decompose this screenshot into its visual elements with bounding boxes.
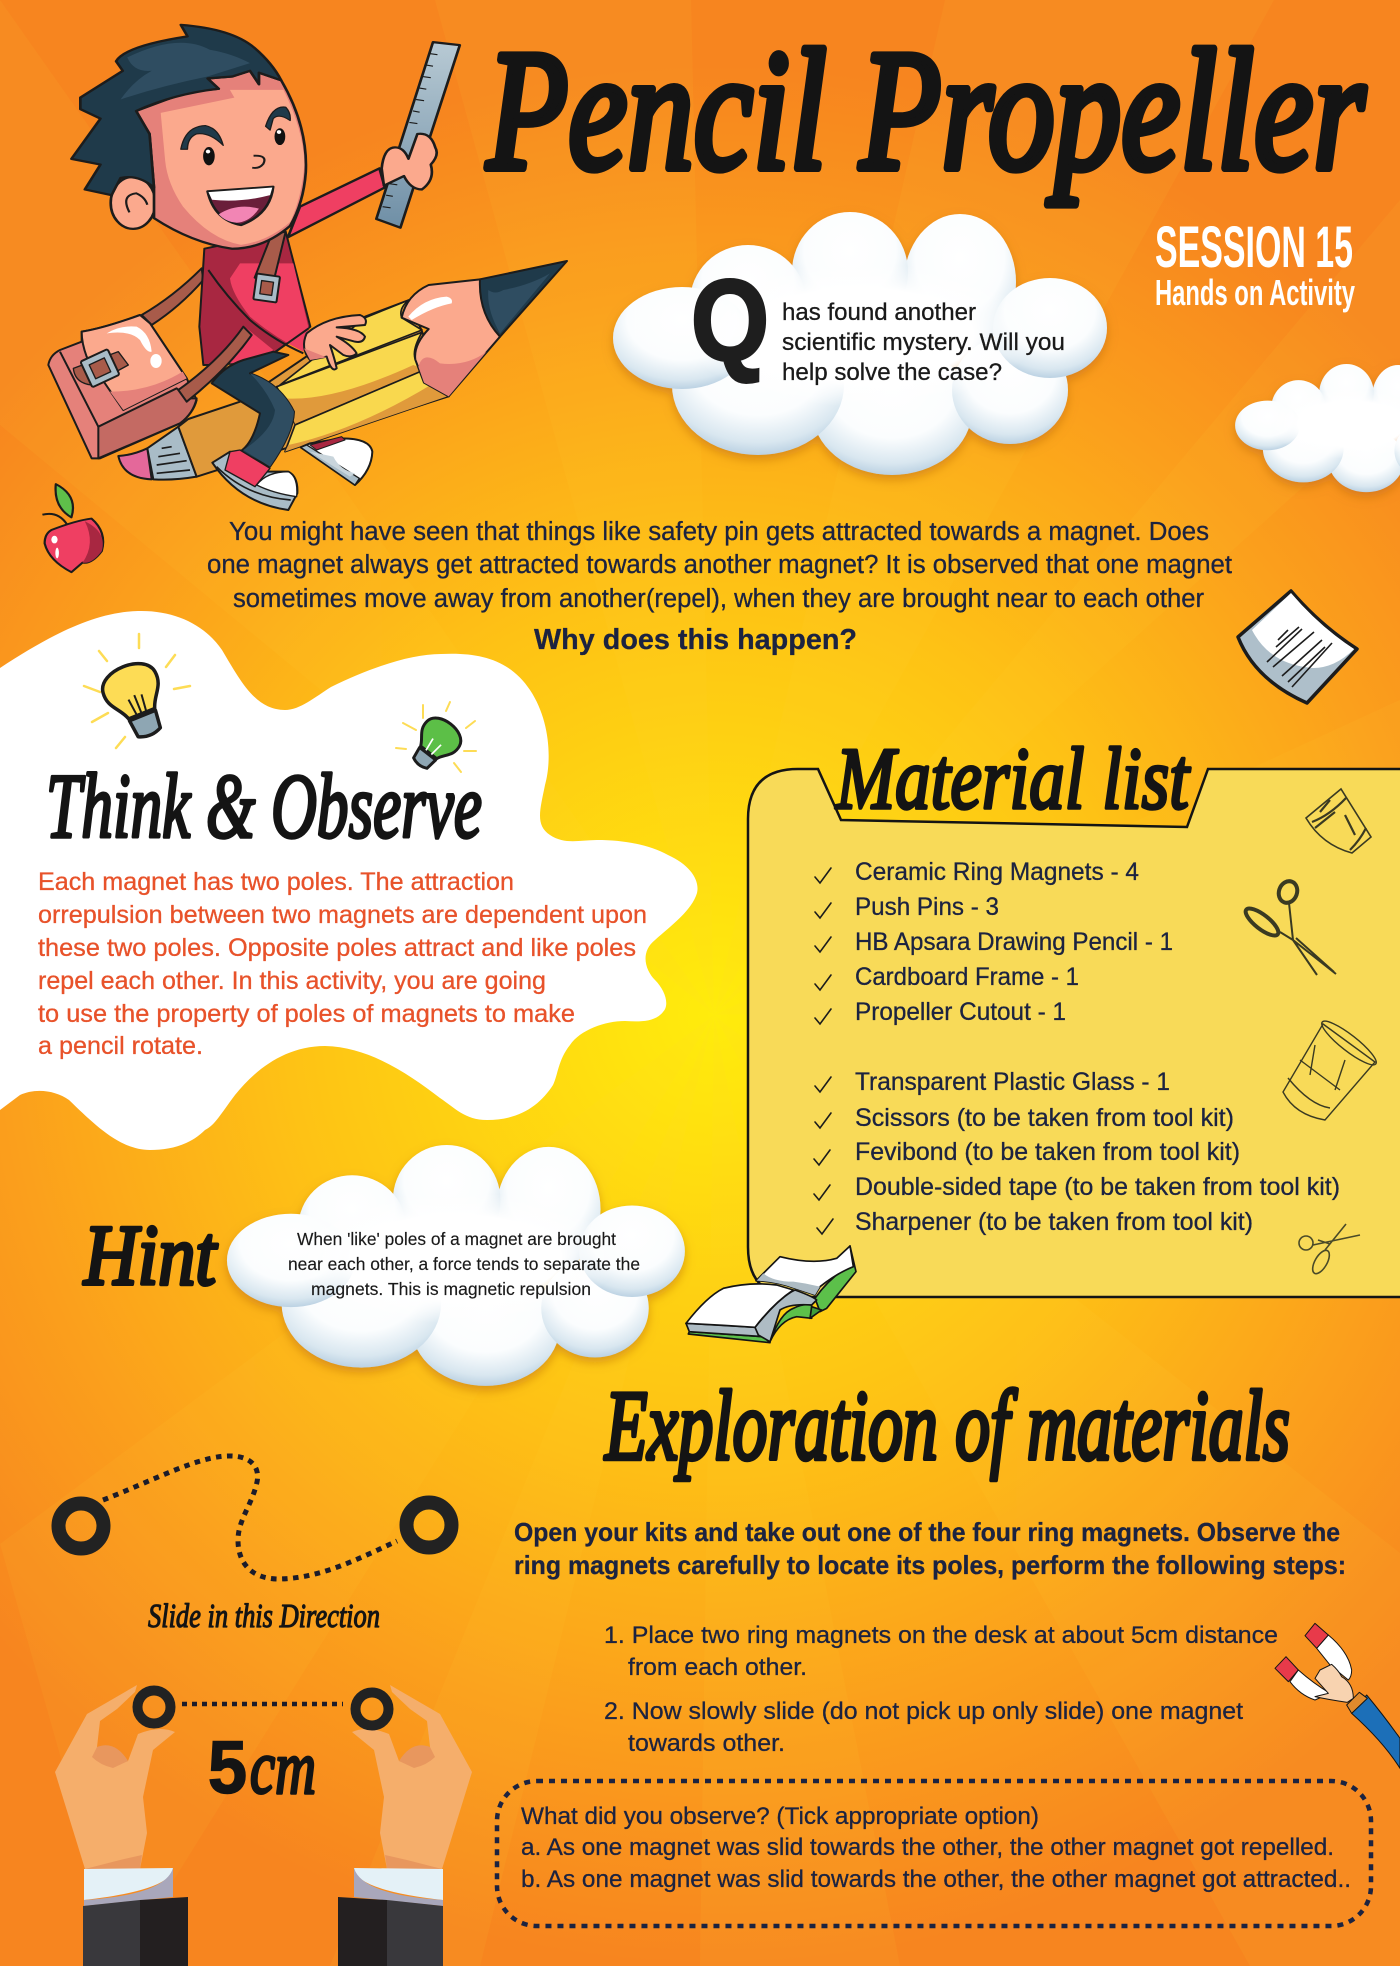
body text: these two poles. Opposite poles attract and like poles — [38, 934, 636, 962]
left hand and sleeve — [55, 1685, 188, 1966]
icon: sketch plastic glass — [1283, 1016, 1381, 1120]
cloud text: help solve the case? — [782, 359, 1002, 386]
material items: Fevibond (to be taken from tool kit) — [855, 1138, 1240, 1166]
caption: slide in this direction: Slide in this Direction — [148, 1598, 380, 1635]
small ring magnets and distance line — [138, 1690, 388, 1726]
numbered steps: from each other. — [628, 1654, 807, 1681]
front strap — [178, 327, 252, 402]
ear — [111, 177, 155, 229]
satchel bag — [48, 315, 197, 458]
body text: repel each other. In this activity, you are going — [38, 967, 546, 995]
material items: Propeller Cutout - 1 — [855, 998, 1066, 1026]
icon: hand holding horseshoe magnet — [1275, 1623, 1400, 1768]
hint text: When 'like' poles of a magnet are brought — [297, 1229, 616, 1249]
observation text: b. As one magnet was slid towards the other, the other magnet got attracted.. — [521, 1866, 1351, 1893]
hair — [71, 25, 281, 195]
observation text: a. As one magnet was slid towards the other, the other magnet got repelled. — [521, 1834, 1334, 1861]
lower body, pencil and satchel — [48, 232, 567, 510]
body text — [38, 868, 647, 1060]
material items: Scissors (to be taken from tool kit) — [855, 1104, 1234, 1132]
pencil — [118, 261, 567, 480]
panel: think & observe blob — [0, 611, 698, 1150]
material items — [855, 858, 1340, 1236]
illustration: boy riding a pencil — [48, 25, 567, 510]
body text: Each magnet has two poles. The attraction — [38, 868, 514, 896]
torso — [199, 232, 310, 365]
heading: think & observe: Think & Observe — [46, 755, 482, 857]
hint text — [288, 1229, 640, 1299]
material items: HB Apsara Drawing Pencil - 1 — [855, 928, 1173, 956]
body text: to use the property of poles of magnets to make — [38, 1000, 575, 1028]
cloud: small right — [1235, 364, 1400, 492]
intro paragraph — [207, 518, 1232, 613]
icon: paper note — [1238, 591, 1357, 703]
callout: observation dashed box — [497, 1781, 1371, 1926]
material items: Cardboard Frame - 1 — [855, 963, 1079, 991]
icon: yellow light bulb — [84, 634, 190, 748]
hand on pencil — [304, 315, 366, 369]
numbered steps: towards other. — [628, 1730, 785, 1757]
observation text — [521, 1803, 1351, 1893]
cloud text: has found another — [782, 299, 976, 326]
icon: sketch scissors — [1242, 879, 1336, 975]
left page block — [688, 1332, 770, 1343]
icon: sketch small glass — [1306, 789, 1371, 853]
intro paragraph: sometimes move away from another(repel), when they are brought near to each other — [233, 585, 1204, 613]
instructions intro — [514, 1517, 1346, 1580]
intro paragraph: You might have seen that things like safety pin gets attracted towards a magnet. Does — [229, 518, 1209, 546]
icon: apple — [42, 484, 103, 572]
session label — [1155, 215, 1355, 313]
distance label 5cm — [208, 1726, 316, 1810]
cloud text — [782, 299, 1065, 386]
front shoe — [212, 450, 297, 510]
body text: orrepulsion between two magnets are dependent upon — [38, 901, 647, 929]
icon: open book — [686, 1246, 856, 1343]
arm raised — [288, 168, 385, 237]
panel: material list — [748, 731, 1400, 1297]
material items: Transparent Plastic Glass - 1 — [855, 1068, 1170, 1096]
distance label 5cm: 5 — [208, 1726, 247, 1809]
tick marks — [814, 868, 833, 1234]
observation text: What did you observe? (Tick appropriate option) — [521, 1803, 1039, 1830]
material items: Ceramic Ring Magnets - 4 — [855, 858, 1139, 886]
ring magnet left — [58, 1504, 104, 1548]
diagram: hands holding magnets 5cm apart — [55, 1685, 472, 1966]
body text: a pencil rotate. — [38, 1032, 203, 1060]
back page — [815, 1246, 856, 1312]
intro paragraph: one magnet always get attracted towards another magnet? It is observed that one magnet — [207, 551, 1232, 579]
question heading: Why does this happen? — [534, 624, 857, 656]
diagram: slide direction path with ring magnets — [58, 1456, 452, 1579]
heading: material list: Material list — [834, 731, 1191, 828]
back bag strap — [142, 268, 203, 325]
material items: Sharpener (to be taken from tool kit) — [855, 1208, 1253, 1236]
hint text: near each other, a force tends to separate the — [288, 1254, 640, 1274]
numbered steps — [604, 1622, 1278, 1757]
back shoe — [301, 437, 372, 485]
legs — [212, 352, 294, 467]
cloud text: scientific mystery. Will you — [782, 329, 1065, 356]
icon: green light bulb — [396, 702, 476, 777]
right hand and sleeve — [338, 1685, 472, 1966]
numbered steps: 2. Now slowly slide (do not pick up only slide) one magnet — [604, 1698, 1243, 1725]
shoulder strap and buckle — [253, 232, 286, 302]
cloud: hint — [227, 1145, 685, 1386]
material items: Push Pins - 3 — [855, 893, 999, 921]
cloud: Q question — [613, 212, 1107, 475]
icon: sketch small scissors — [1299, 1224, 1360, 1276]
hint heading: Hint — [83, 1207, 218, 1303]
face — [136, 71, 306, 249]
hint text: magnets. This is magnetic repulsion — [311, 1279, 591, 1299]
fist holding ruler — [382, 134, 437, 189]
Q letter: Q — [691, 257, 769, 385]
instructions intro: Open your kits and take out one of the four ring magnets. Observe the — [514, 1517, 1340, 1547]
numbered steps: 1. Place two ring magnets on the desk at about 5cm distance — [604, 1622, 1278, 1649]
upper body: arm, ruler and head — [71, 25, 460, 249]
instructions intro: ring magnets carefully to locate its poles, perform the following steps: — [514, 1550, 1346, 1580]
distance label 5cm: cm — [250, 1726, 316, 1810]
material items: Double-sided tape (to be taken from tool kit) — [855, 1173, 1340, 1201]
ruler — [376, 42, 460, 228]
ring magnet right — [406, 1502, 452, 1548]
